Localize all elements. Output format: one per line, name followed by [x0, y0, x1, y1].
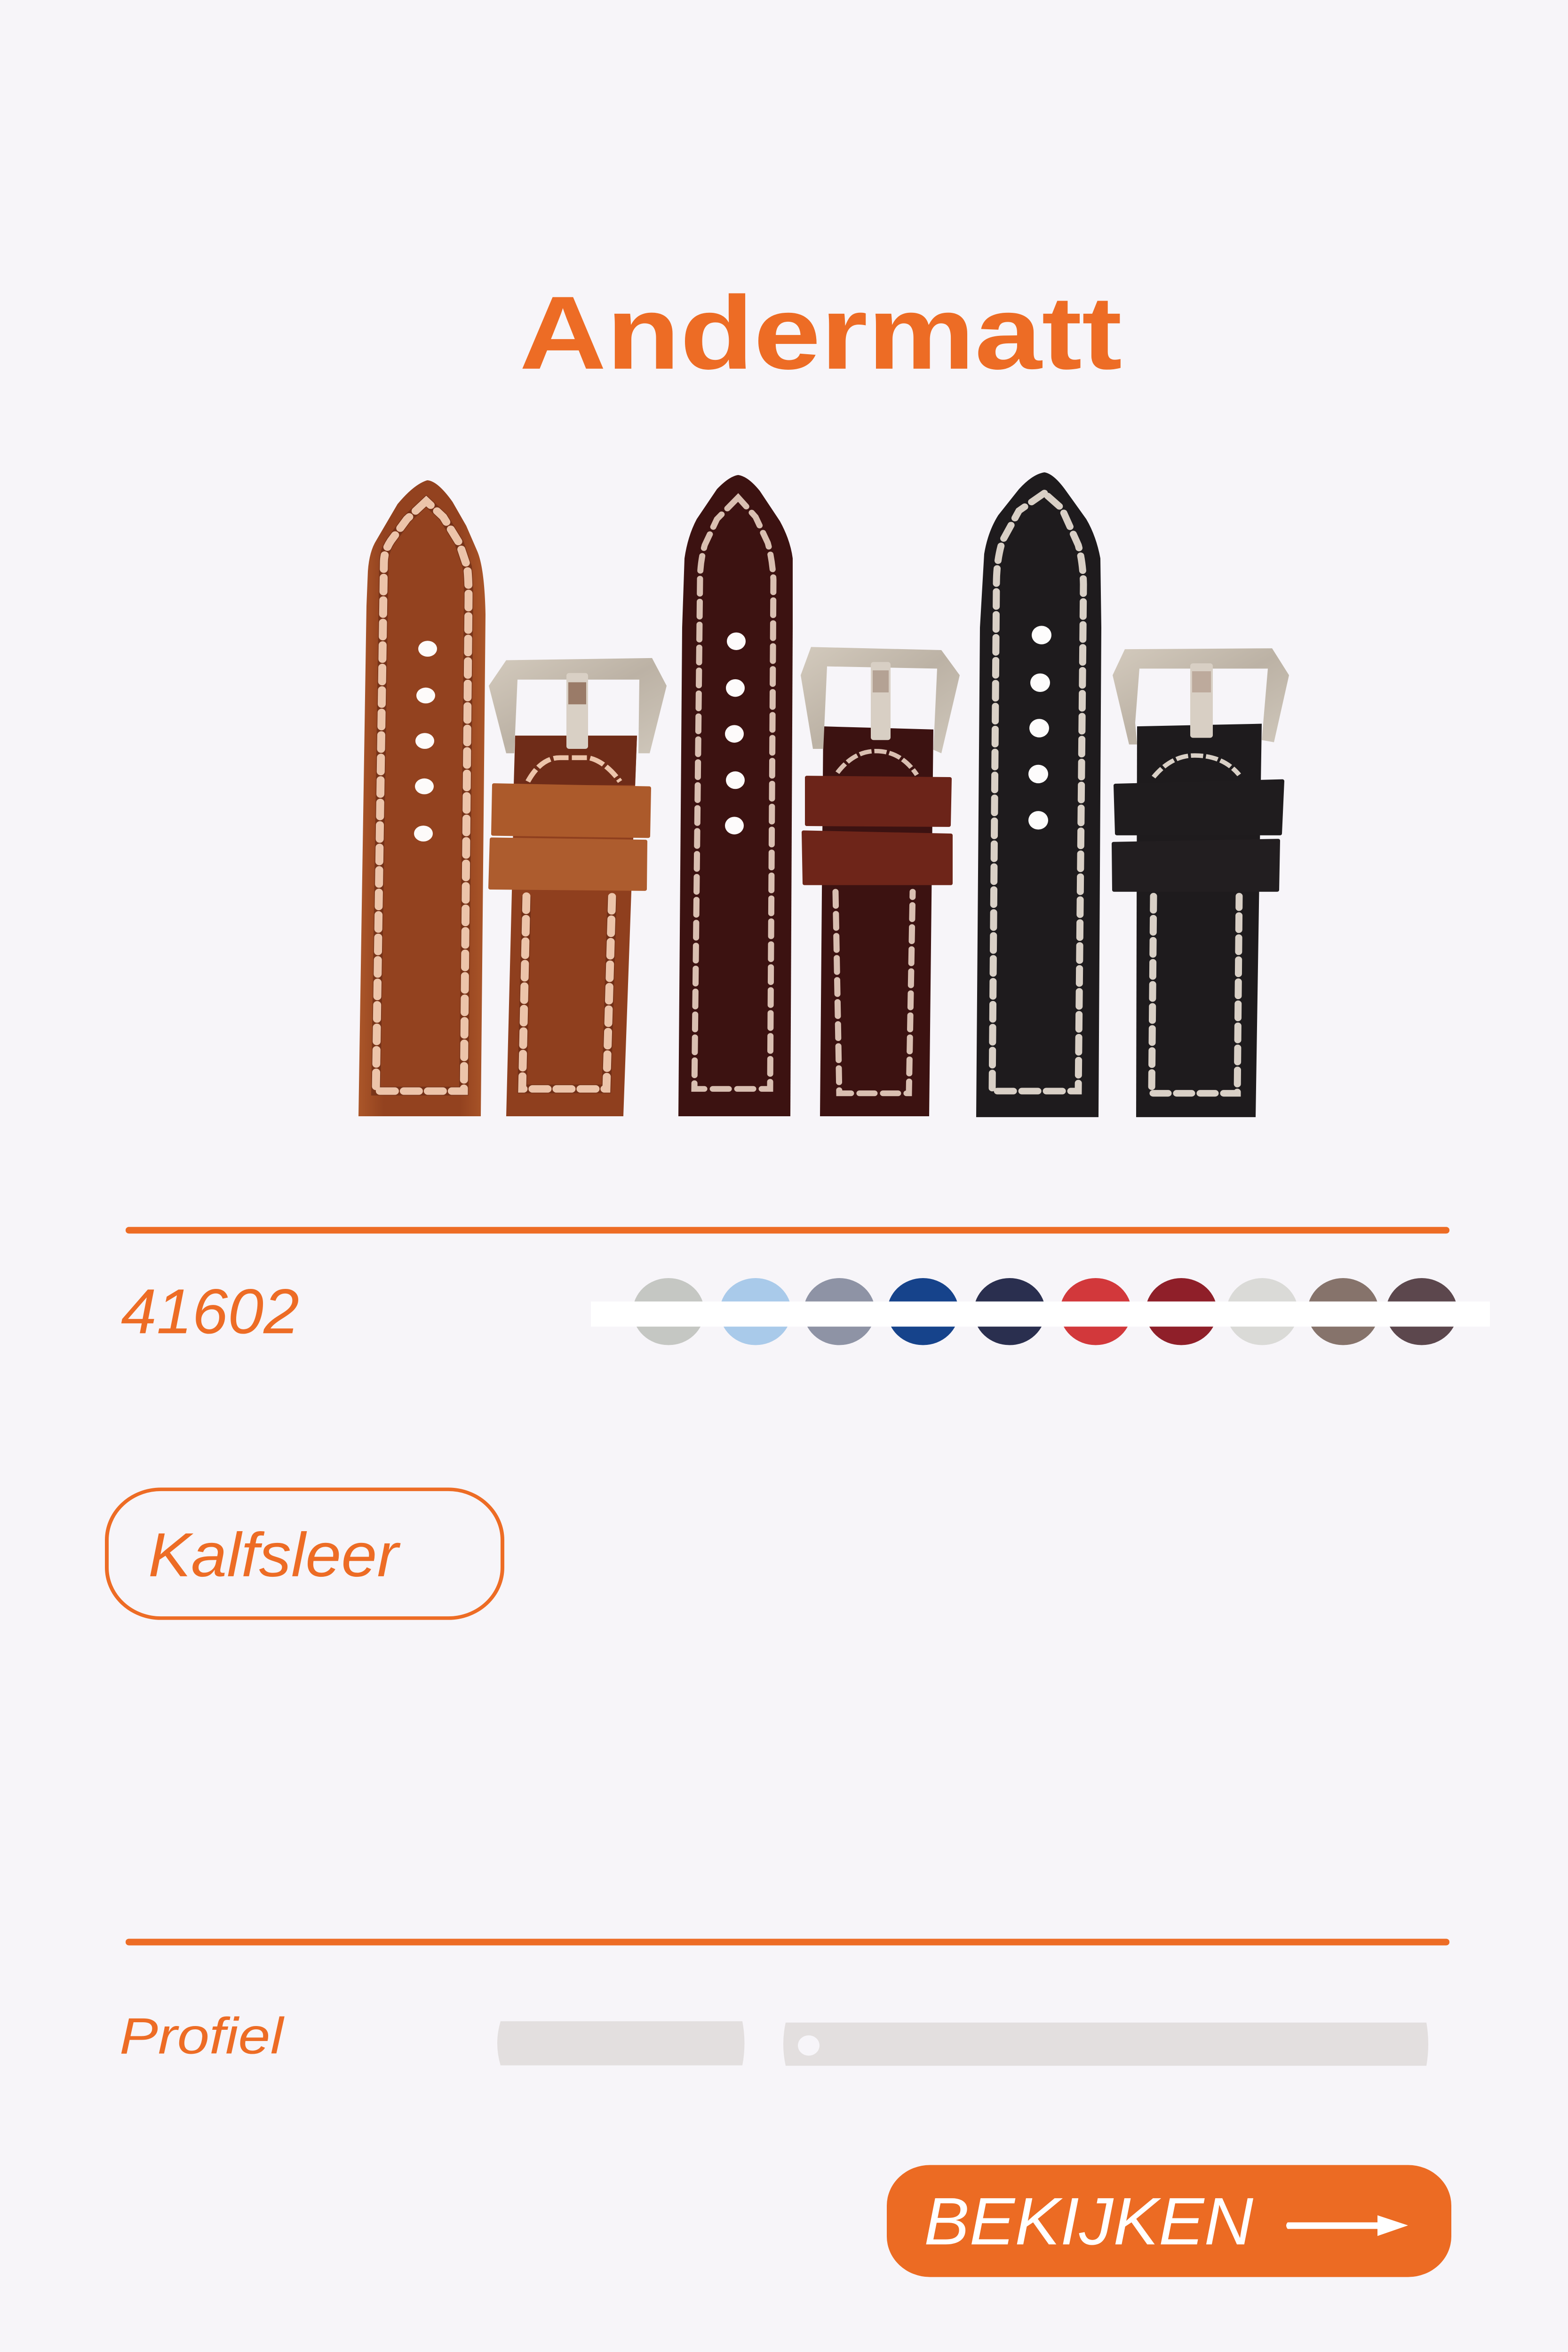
- strap holes: [725, 632, 746, 834]
- cognac long strap: [358, 480, 486, 1116]
- button: BEKIJKEN: BEKIJKEN: [924, 2185, 1254, 2259]
- bottom divider: [126, 1939, 1449, 1946]
- black buckle strap: [1113, 648, 1289, 1117]
- dark brown buckle strap: [801, 647, 960, 1116]
- material tag: Kalfsleer: [107, 1489, 502, 1618]
- colour swatches: [633, 1278, 1457, 1345]
- icon: arrow: [1286, 2215, 1408, 2236]
- button: BEKIJKEN: [887, 2165, 1451, 2277]
- top divider: [126, 1227, 1449, 1233]
- material tag: Kalfsleer: Kalfsleer: [148, 1520, 401, 1589]
- strap holes: [1028, 626, 1051, 830]
- title: Andermatt: [519, 275, 1122, 391]
- product photo: three watch straps: [358, 472, 1289, 1117]
- strap holes: [414, 641, 437, 842]
- article number: 41602: [121, 1276, 299, 1347]
- black long strap: [976, 472, 1101, 1117]
- cognac buckle strap: [489, 658, 667, 1116]
- profile bar: short: [497, 2021, 744, 2066]
- white band over swatches: [591, 1302, 1490, 1327]
- profile bar: long: [783, 2023, 1428, 2066]
- dark brown long strap: [678, 475, 793, 1116]
- profile label: Profiel: [119, 2007, 285, 2064]
